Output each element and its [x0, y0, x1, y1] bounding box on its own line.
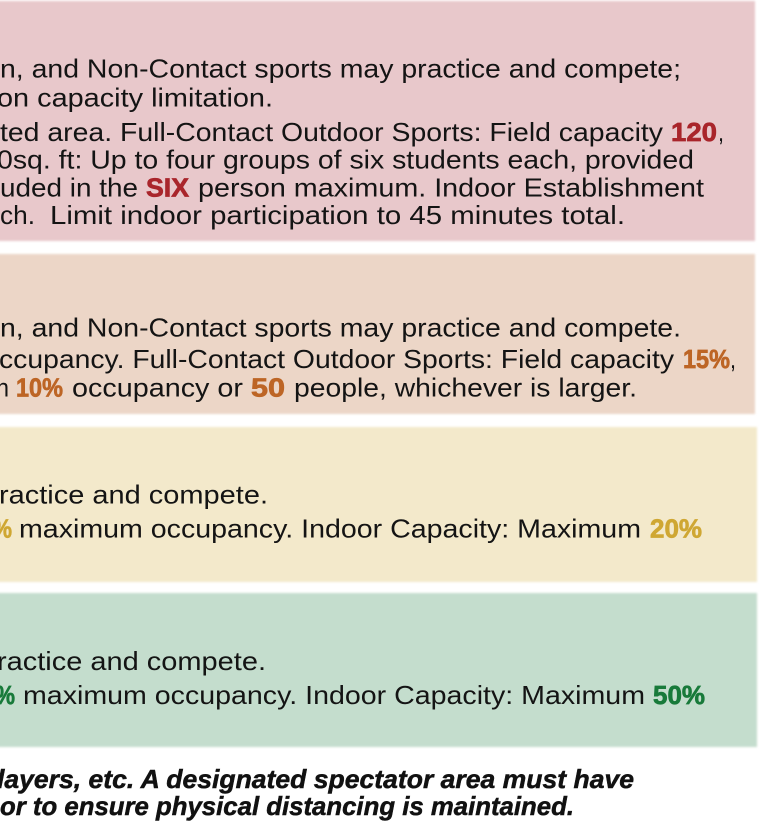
- orange panel text: 10%: [16, 372, 63, 402]
- red panel text: n, and Non-Contact sports may practice and compete;: [0, 54, 681, 84]
- yellow panel text: ractice and compete.: [0, 480, 268, 510]
- green panel text: [0, 646, 705, 710]
- footnote: or to ensure physical distancing is maintained.: [0, 791, 574, 821]
- red panel text: ted area. Full-Contact Outdoor Sports: Field capacity: [0, 117, 663, 147]
- panel: red level: [0, 1, 755, 241]
- red panel text: 0sq. ft: Up to four groups of six students each, provided: [0, 144, 694, 174]
- green panel text: 50%: [653, 680, 705, 710]
- orange panel text: ccupancy. Full-Contact Outdoor Sports: Field capacity: [0, 344, 674, 374]
- yellow panel text: maximum occupancy. Indoor Capacity: Maximum: [19, 514, 641, 544]
- panel: green level: [0, 593, 757, 747]
- yellow panel background: [0, 427, 757, 582]
- green panel background: [0, 593, 757, 747]
- footnote: layers, etc. A designated spectator area must have: [0, 764, 634, 794]
- red panel text: person maximum. Indoor Establishment: [198, 172, 705, 202]
- red panel background: [0, 1, 755, 241]
- green panel text: maximum occupancy. Indoor Capacity: Maximum: [23, 680, 645, 710]
- red panel text: SIX: [146, 172, 190, 202]
- red panel text: ,: [718, 117, 724, 147]
- orange panel text: [0, 312, 736, 402]
- orange panel text: ,: [730, 344, 736, 374]
- panel: orange level: [0, 254, 755, 414]
- red panel text: Limit indoor participation to 45 minutes total.: [50, 200, 625, 230]
- footnote: [0, 764, 634, 821]
- red panel text: uded in the: [0, 172, 138, 202]
- orange panel text: people, whichever is larger.: [294, 372, 637, 402]
- orange panel text: 15%: [683, 344, 730, 374]
- red panel text: on capacity limitation.: [0, 82, 273, 112]
- green panel text: ractice and compete.: [0, 646, 266, 676]
- orange panel text: n, and Non-Contact sports may practice and compete.: [0, 312, 681, 342]
- yellow panel text: 20%: [650, 514, 702, 544]
- yellow panel text: [0, 480, 702, 544]
- orange panel text: occupancy or: [72, 372, 243, 402]
- orange panel text: 50: [251, 372, 285, 402]
- orange panel background: [0, 254, 755, 414]
- panel: yellow level: [0, 427, 757, 582]
- red panel text: 120: [671, 117, 717, 147]
- red panel text: ch.: [0, 200, 35, 230]
- red panel text: [0, 54, 724, 230]
